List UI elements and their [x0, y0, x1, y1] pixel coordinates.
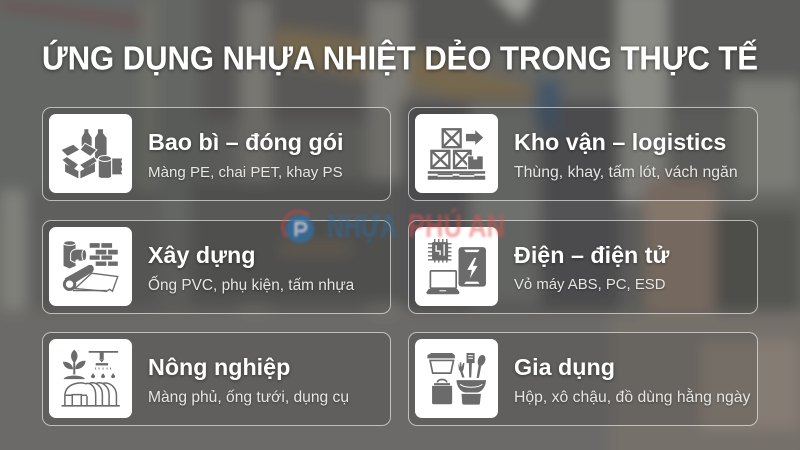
text block: Màng PE, chai PET, khay PS	[148, 164, 343, 181]
text block: Vỏ máy ABS, PC, ESD	[514, 277, 665, 293]
icon: crates on pallet	[414, 114, 498, 192]
icon: household containers and utensils	[414, 338, 498, 418]
text block	[513, 242, 671, 293]
panel: Nông nghiệp	[42, 332, 391, 426]
text block: Thùng, khay, tấm lót, vách ngăn	[514, 164, 738, 181]
text block: Kho vận – logistics	[514, 129, 726, 155]
text block: Điện – điện tử	[514, 242, 669, 268]
text block	[148, 129, 343, 182]
text block: Nông nghiệp	[148, 354, 290, 380]
text block	[514, 354, 750, 407]
panel: Xây dựng	[42, 220, 391, 314]
text block: Gia dụng	[514, 354, 615, 380]
icon: packaging box and bottles	[48, 114, 132, 192]
icon: pipes, bricks and sheet	[48, 226, 132, 306]
text block: Ống PVC, phụ kiện, tấm nhựa	[148, 277, 354, 294]
text block	[148, 354, 349, 407]
watermark logo: NHỰA	[327, 208, 397, 244]
icon: plant, sprinkler and greenhouse	[48, 338, 132, 418]
text block: Xây dựng	[148, 242, 256, 268]
text block	[514, 129, 738, 182]
panel: Điện – điện tử	[408, 220, 758, 314]
text block	[148, 242, 354, 295]
watermark logo: PHÚ AN	[408, 208, 505, 244]
icon: chip, phone and laptop	[414, 226, 498, 306]
title: ỨNG DỤNG NHỰA NHIỆT DẺO TRONG THỰC TẾ	[42, 40, 758, 76]
text block: Màng phủ, ống tưới, dụng cụ	[148, 389, 349, 406]
text block: Bao bì – đóng gói	[148, 129, 343, 155]
panel: Bao bì – đóng gói	[42, 107, 391, 201]
panel: Kho vận – logistics	[408, 107, 758, 201]
text block: Hộp, xô chậu, đồ dùng hằng ngày	[514, 389, 750, 406]
panel: Gia dụng	[408, 332, 758, 426]
